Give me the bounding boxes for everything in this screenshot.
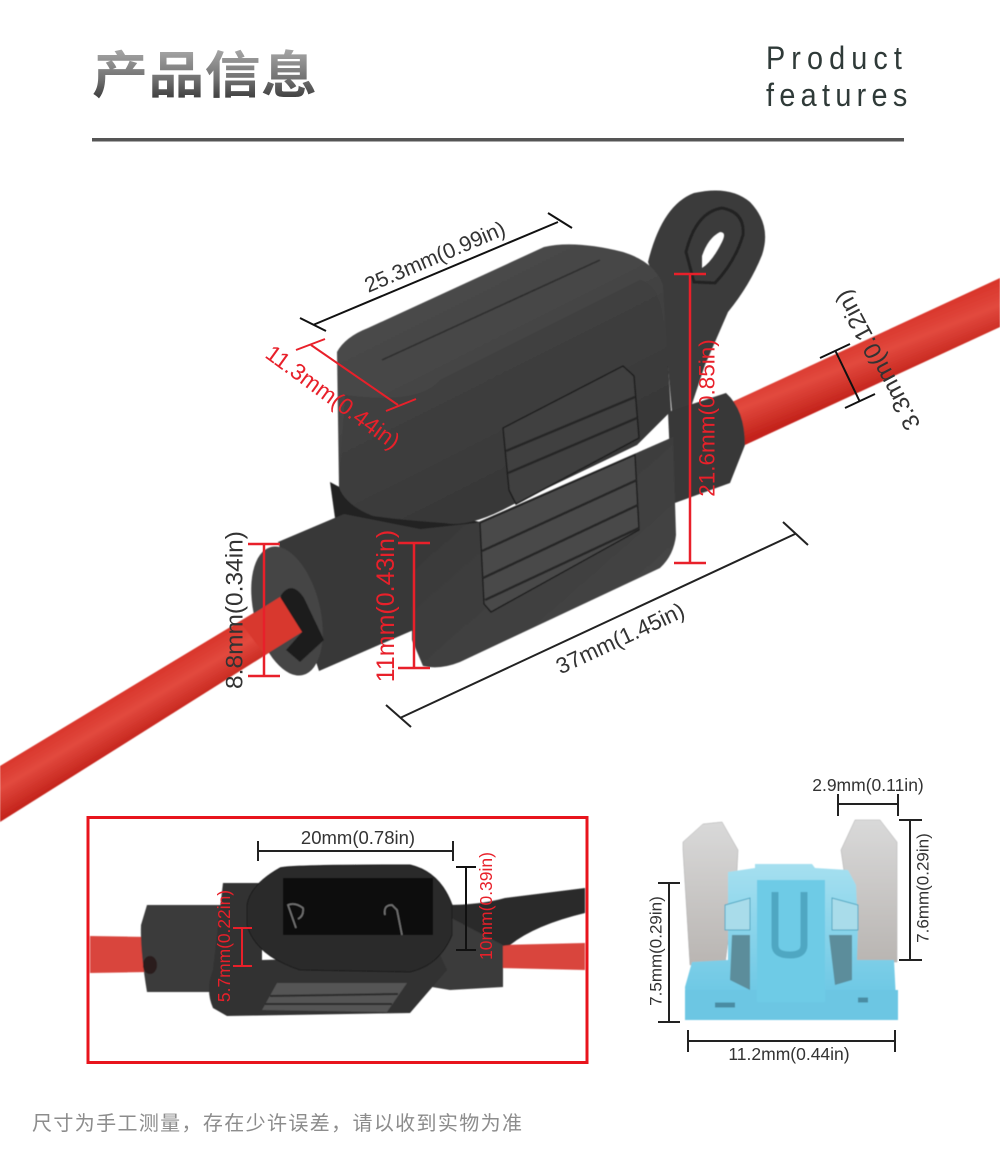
panel: red framed top view <box>88 818 587 1062</box>
U-shaped fuse link <box>775 892 804 955</box>
dimension: 37mm <box>386 522 808 727</box>
holder body <box>209 883 447 1016</box>
dimension: 7.6mm: 7.6mm(0.29in) <box>914 833 932 943</box>
cap seam <box>382 260 600 360</box>
central column <box>757 880 825 1002</box>
header rule <box>92 138 904 142</box>
right blade <box>841 820 897 962</box>
red wires <box>90 936 585 973</box>
dimension: 11.2mm <box>688 1030 895 1064</box>
body backing between cap and sleeve <box>330 482 480 560</box>
dimension: 37mm: 37mm(1.45in) <box>552 598 688 679</box>
dimension: 25.3mm <box>300 213 572 331</box>
subtitle: Product features: Product <box>766 41 902 76</box>
subtitle: Product features: features <box>766 78 907 113</box>
dimension: 8.8mm: 8.8mm(0.34in) <box>222 531 248 689</box>
left blade <box>683 822 738 965</box>
right red wire <box>732 278 1000 445</box>
panel: blue mini fuse <box>646 775 932 1064</box>
title: 产品信息: 产品信息 <box>92 49 317 104</box>
dimension: 20mm <box>258 827 453 861</box>
strap hole shading <box>686 208 743 283</box>
dimension: 21.6mm: 21.6mm(0.85in) <box>694 339 720 497</box>
oval socket <box>247 865 452 972</box>
dimension: 2.9mm: 2.9mm(0.11in) <box>812 775 924 795</box>
right sleeve <box>668 393 745 504</box>
dimension: 2.9mm <box>812 775 924 816</box>
dimension: 21.6mm <box>674 274 720 563</box>
dimension: 11mm <box>372 530 430 682</box>
dimension: 11.3mm: 11.3mm(0.44in) <box>261 340 405 454</box>
base marks <box>715 1000 868 1005</box>
fuse photo <box>683 820 898 1020</box>
terminals visible through housing <box>730 935 852 990</box>
strap loop <box>648 190 765 412</box>
dimension: 7.5mm <box>646 883 680 1022</box>
dimension: 5.7mm <box>214 890 252 1002</box>
footnote: 尺寸为手工测量，存在少许误差，请以收到实物为准 <box>32 1112 522 1135</box>
top view photo <box>90 865 585 1016</box>
product photo: fuse holder with wires <box>0 190 1000 822</box>
dimension: 5.7mm: 5.7mm(0.22in) <box>214 890 234 1002</box>
dimension: 10mm <box>456 852 496 960</box>
dimension: 8.8mm <box>222 531 280 689</box>
socket opening <box>283 878 433 935</box>
dimension: 25.3mm: 25.3mm(0.99in) <box>361 217 509 297</box>
upper grip <box>503 366 639 504</box>
grip <box>262 983 407 1012</box>
left red wire <box>0 597 302 822</box>
dimension: 7.5mm: 7.5mm(0.29in) <box>646 896 666 1006</box>
dimension: 20mm: 20mm(0.78in) <box>301 827 415 848</box>
left sleeve <box>239 514 425 683</box>
dimension: 7.6mm <box>899 820 932 960</box>
dimension: 10mm: 10mm(0.39in) <box>476 852 496 960</box>
sleeves <box>141 905 503 992</box>
black strap <box>445 888 585 950</box>
base strip <box>685 990 898 1020</box>
contact hooks <box>288 904 402 935</box>
plastic housing <box>685 864 897 1020</box>
lower body <box>412 437 676 667</box>
dimension: 11.2mm: 11.2mm(0.44in) <box>728 1044 850 1064</box>
side clips <box>725 898 858 930</box>
dimension: 11mm: 11mm(0.43in) <box>372 530 400 682</box>
upper cap <box>337 244 671 524</box>
subtitle: Product features <box>766 41 907 113</box>
lower grip <box>480 455 639 612</box>
wire hole <box>143 956 157 974</box>
cap front shading <box>339 280 671 524</box>
dimension: 3.3mm: 3.3mm(0.12in) <box>830 285 926 435</box>
